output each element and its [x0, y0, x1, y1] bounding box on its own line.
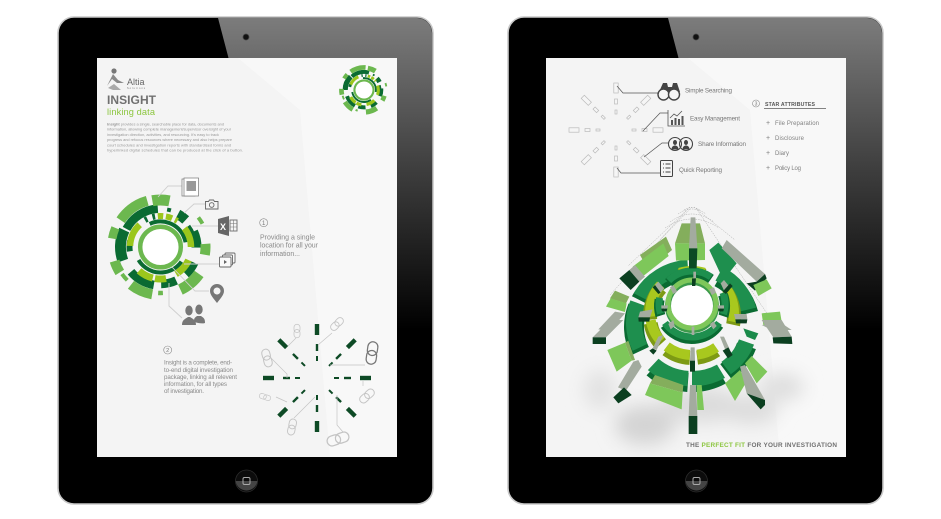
step 3 number: 3 — [755, 102, 758, 108]
step 2 number: 2 — [166, 348, 169, 354]
chain link icons with leaders — [259, 316, 379, 447]
tablet screen: left — [97, 58, 397, 457]
icon: document — [182, 178, 198, 196]
star attributes list: + — [766, 165, 770, 172]
intro text block: hyperlinked digital schedules that can be produced at the click of a button. — [107, 148, 243, 152]
3D blocks: upper half — [598, 217, 792, 331]
step 2 text: to-end digital investigation — [164, 367, 234, 374]
star attributes list: Policy Log — [775, 166, 801, 172]
intro text block — [107, 122, 243, 152]
step 2 text: package, linking all relevent — [164, 374, 237, 381]
icon: binoculars — [658, 83, 680, 100]
step 1 text: location for all your — [260, 242, 319, 250]
label: Share Information: Share Information — [698, 141, 746, 148]
step 3 number — [752, 100, 760, 108]
icon: people — [182, 304, 205, 325]
logo: Altia Solutions — [107, 68, 146, 90]
label: Simple Searching: Simple Searching — [685, 88, 732, 94]
star attributes list: Disclosure — [775, 136, 805, 142]
heading: INSIGHT: INSIGHT — [107, 93, 157, 107]
icon: report checklist — [660, 160, 672, 176]
intro text block: information, allowing complete management/supervisor oversight of your — [107, 127, 232, 132]
star attributes list: + — [766, 120, 770, 127]
radial dash diagram — [263, 324, 371, 432]
icon: map pin — [210, 284, 224, 303]
star attributes list: File Preparation — [775, 121, 819, 127]
label: Quick Reporting: Quick Reporting — [679, 167, 722, 174]
step 2 text — [164, 360, 237, 395]
step 1 number: 1 — [262, 221, 266, 227]
3D model ground shadow — [584, 370, 804, 445]
icon: camera — [206, 200, 218, 209]
logo: Altia Solutions: Solutions — [127, 86, 146, 90]
icon: spreadsheet — [218, 216, 237, 236]
tablet frame: right — [508, 17, 883, 504]
tagline: THE PERFECT FIT FOR YOUR INVESTIGATION — [686, 442, 837, 449]
step 1 text: Providing a single — [260, 234, 315, 242]
step 2 text: of investigation. — [164, 388, 204, 395]
icon: share circles — [668, 138, 692, 150]
3D segmented ring — [613, 247, 771, 403]
screen sheen: right — [688, 58, 846, 457]
tablet screen: right — [546, 58, 846, 457]
star attributes heading: STAR ATTRIBUTES — [765, 102, 816, 108]
small logo ring — [323, 49, 405, 131]
logo: Altia Solutions: Altia — [127, 77, 145, 87]
icon: bar chart — [668, 110, 685, 126]
step 1 text — [260, 234, 319, 258]
subheading: linking data: linking data — [107, 107, 156, 117]
step 1 number — [260, 219, 268, 227]
leader lines — [158, 186, 219, 318]
step 2 text: Insight is a complete, end- — [164, 360, 232, 367]
intro text block: investigation direction, activities, and resourcing. It's easy to track — [107, 132, 219, 137]
star attributes list — [766, 120, 819, 172]
star attributes list: Diary — [775, 151, 789, 157]
star attributes list: + — [766, 135, 770, 142]
step 2 number — [164, 346, 172, 354]
screen sheen: left — [238, 58, 397, 457]
intro text block: court schedules and investigation reports with standardised forms and — [107, 142, 231, 147]
tablet frame: left — [58, 17, 433, 504]
intro text block: Insight provides a single, searchable place for data, documents and — [107, 122, 224, 126]
step 1 text: information... — [260, 251, 300, 258]
outlined radial dash diagram — [569, 83, 663, 177]
icon: video — [220, 253, 235, 267]
main segmented ring chart — [93, 180, 228, 314]
3D model wire lines — [610, 207, 768, 315]
icon: spreadsheet: X — [220, 222, 226, 232]
intro text block: progress and refocus resources where necessary and also helps prepare — [107, 137, 232, 142]
feature leader lines — [617, 86, 669, 173]
star attributes list: + — [766, 150, 770, 157]
3D blocks: lower half — [593, 320, 792, 434]
label: Easy Management: Easy Management — [690, 116, 740, 122]
step 2 text: information, for all types — [164, 381, 227, 388]
